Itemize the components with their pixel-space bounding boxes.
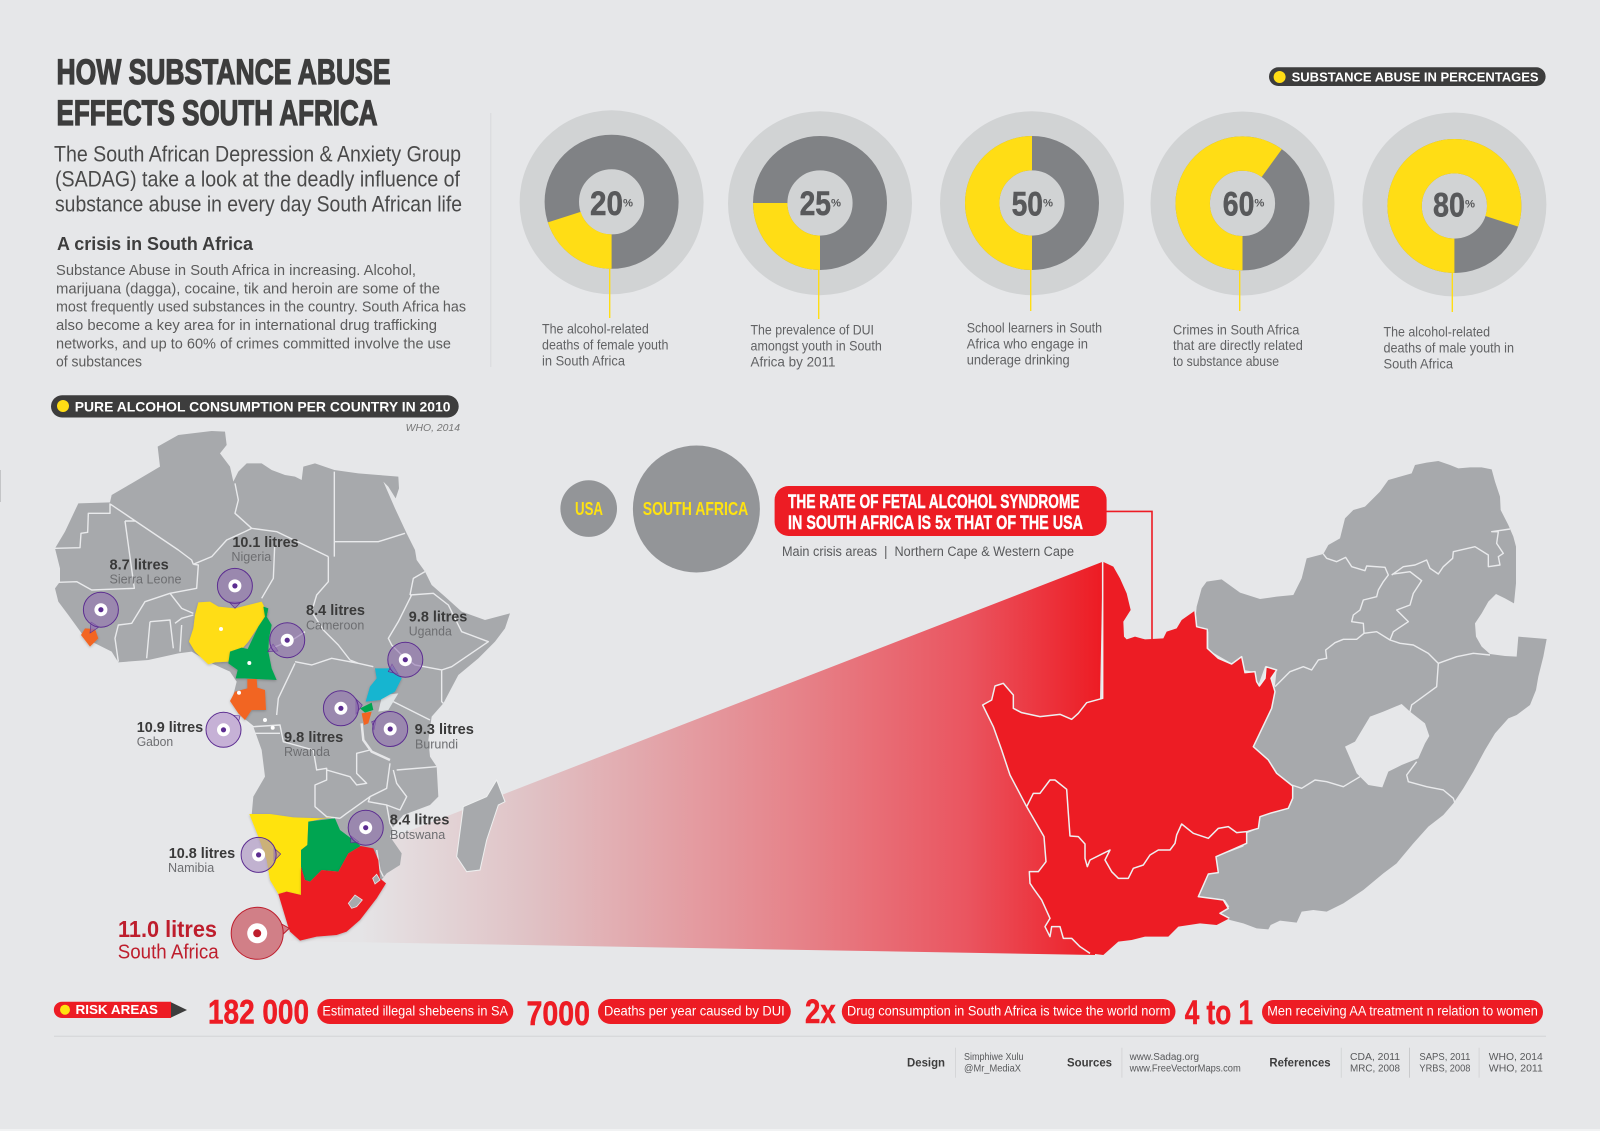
comparison circle: South Africa <box>633 446 760 572</box>
donut chart: 80 percent: deaths of male youth in <box>1384 340 1514 356</box>
footer credits: Sources <box>1067 1056 1112 1070</box>
donut chart: 25 percent: Africa by 2011 <box>750 353 836 369</box>
donut chart: 25 percent: 25 <box>800 185 831 223</box>
marker: Burundi <box>372 712 408 746</box>
donut chart: 80 percent <box>1362 112 1546 371</box>
Cameroon <box>228 607 277 680</box>
Rwanda <box>360 703 373 713</box>
label: South Africa: South Africa <box>118 942 220 964</box>
intro body text: Substance Abuse in South Africa in increasing. Alcohol, <box>56 262 416 279</box>
Lake Tanganyika <box>362 723 390 760</box>
risk areas tag: RISK AREAS <box>76 1002 158 1017</box>
label: Nigeria <box>231 534 299 564</box>
footer credits: MRC, 2008 <box>1350 1063 1400 1074</box>
label: South Africa: 11.0 litres <box>118 916 217 942</box>
intro body text: also become a key area for in international drug trafficking <box>56 317 437 334</box>
southern Africa detail <box>245 702 505 877</box>
label: Uganda <box>409 608 467 639</box>
label: Cameroon: Cameroon <box>306 618 364 632</box>
comparison circle: South Africa: SOUTH AFRICA <box>643 499 748 519</box>
donut chart: 50 percent: 50 <box>1012 186 1043 224</box>
label: Uganda: 9.8 litres <box>409 608 467 626</box>
donut chart: 20 percent: in South Africa <box>542 352 625 368</box>
donut chart: 60 percent: Crimes in South Africa <box>1173 321 1299 337</box>
donut chart: 50 percent: underage drinking <box>967 352 1070 368</box>
label: Cameroon <box>306 602 365 632</box>
crisis areas note: Main crisis areas | Northern Cape & Western Cape <box>782 544 1074 559</box>
marker: Botswana <box>348 810 383 845</box>
donut chart: 80 percent: The alcohol-related <box>1384 324 1490 340</box>
label: Nigeria: 10.1 litres <box>232 534 299 551</box>
label: Namibia <box>168 845 235 875</box>
subtitle: substance abuse in every day South African life <box>55 192 462 217</box>
footer credits: @Mr_MediaX <box>964 1063 1021 1074</box>
South Africa <box>278 846 386 941</box>
marker: Rwanda <box>323 691 362 726</box>
subtitle <box>54 142 462 217</box>
donut chart: 20 percent: % <box>623 198 633 210</box>
Cape province borders <box>983 562 1293 953</box>
callout: fetal alcohol syndrome: IN SOUTH AFRICA IS 5x THAT OF THE USA <box>788 512 1083 534</box>
donut chart: 50 percent: % <box>1043 198 1053 210</box>
label: Cameroon: 8.4 litres <box>306 602 365 619</box>
stat: 2x: 2x <box>805 993 836 1031</box>
footer credits: Simphiwe Xulu <box>964 1052 1024 1063</box>
stat: 7000 <box>526 995 791 1033</box>
footer credits: Design <box>907 1056 945 1070</box>
label: Gabon: 10.9 litres <box>137 719 203 736</box>
donut chart: 80 percent: % <box>1465 198 1475 210</box>
label: Burundi <box>415 721 474 752</box>
stat: 4 to 1: 4 to 1 <box>1185 994 1253 1032</box>
stat: 182 000 <box>208 993 513 1031</box>
donut chart: 60 percent: to substance abuse <box>1173 353 1279 369</box>
label: Burundi: 9.3 litres <box>415 721 474 738</box>
label: Namibia: 10.8 litres <box>169 845 235 862</box>
marker: South Africa <box>231 907 289 959</box>
donut chart: 50 percent: Africa who engage in <box>967 336 1088 352</box>
Namibia <box>249 814 333 895</box>
Lake Victoria <box>378 693 398 712</box>
label: Botswana: Botswana <box>390 827 446 842</box>
donut chart: 20 percent: The alcohol-related <box>542 320 649 336</box>
Lesotho <box>348 895 362 908</box>
stat: 2x <box>805 993 1176 1031</box>
donut chart: 80 percent: 80 <box>1433 187 1465 225</box>
subtitle: The South African Depression & Anxiety Group <box>54 142 461 167</box>
donut chart: 20 percent: 20 <box>590 185 623 223</box>
title: EFFECTS SOUTH AFRICA <box>56 94 378 133</box>
heading: a crisis in South Africa: A crisis in South Africa <box>57 234 254 254</box>
source note: WHO, 2014 <box>406 423 460 434</box>
donut chart: 60 percent: % <box>1254 198 1265 210</box>
label: Rwanda <box>284 729 343 759</box>
intro body text <box>56 262 466 371</box>
donut chart: 60 percent <box>1150 112 1334 369</box>
risk areas tag <box>54 1002 187 1018</box>
footer credits: www.Sadag.org <box>1129 1052 1199 1063</box>
intro body text: networks, and up to 60% of crimes committed involve the use <box>56 335 451 352</box>
donut chart: 50 percent <box>940 111 1124 368</box>
pill heading: pure alcohol consumption <box>51 395 459 418</box>
stat: 7000: 7000 <box>526 995 590 1033</box>
footer credits: WHO, 2011 <box>1489 1063 1543 1074</box>
marker: Sierra Leone <box>83 592 118 633</box>
comparison circle: USA <box>560 480 617 537</box>
label: Namibia: Namibia <box>168 860 215 875</box>
map: Africa <box>55 431 510 941</box>
capital dots <box>219 627 275 730</box>
marker: Namibia <box>241 837 281 872</box>
marker: Uganda <box>388 642 423 677</box>
southern borders <box>245 702 437 877</box>
label: Rwanda: Rwanda <box>284 744 331 759</box>
donut chart: 20 percent <box>520 110 704 368</box>
stat: 2x: Drug consumption in South Africa is twice the world norm <box>847 1004 1170 1019</box>
title <box>56 53 390 133</box>
label: Nigeria: Nigeria <box>231 549 272 564</box>
comparison circle: USA: USA <box>575 499 603 519</box>
grey provinces <box>1195 461 1547 929</box>
pill heading: substance abuse in percentages: SUBSTANCE ABUSE IN PERCENTAGES <box>1292 70 1539 85</box>
Sierra Leone <box>81 628 98 647</box>
donut chart: 50 percent: School learners in South <box>967 320 1102 336</box>
map: South Africa provinces <box>983 461 1547 955</box>
stat: 7000: Deaths per year caused by DUI <box>604 1004 785 1019</box>
callout connector <box>1106 511 1152 639</box>
donut chart: 60 percent: 60 <box>1223 186 1254 224</box>
pill heading: pure alcohol consumption: PURE ALCOHOL CONSUMPTION PER COUNTRY IN 2010 <box>75 398 451 414</box>
label: Sierra Leone: 8.7 litres <box>110 556 169 573</box>
footer credits: CDA, 2011 <box>1350 1052 1400 1063</box>
intro body text: marijuana (dagga), cocaine, tik and heroin are some of the <box>56 280 440 297</box>
stat: 182 000: 182 000 <box>208 993 309 1031</box>
footer credits <box>907 1048 1543 1078</box>
label: Gabon: Gabon <box>137 734 173 749</box>
callout: fetal alcohol syndrome: THE RATE OF FETAL ALCOHOL SYNDROME <box>788 491 1080 513</box>
subtitle: (SADAG) take a look at the deadly influence of <box>55 167 461 192</box>
zoom gradient band <box>290 562 1103 955</box>
label: Sierra Leone <box>110 556 182 587</box>
country borders <box>55 472 488 715</box>
marker: Gabon <box>206 712 241 747</box>
stat: 4 to 1 <box>1185 994 1543 1032</box>
marker: Cameroon <box>268 623 305 658</box>
footer credits: SAPS, 2011 <box>1419 1052 1471 1063</box>
Northern and Western Cape <box>983 562 1293 955</box>
label: Gabon <box>137 719 203 749</box>
donut chart: 25 percent: amongst youth in South <box>750 337 882 353</box>
donut chart: 25 percent: The prevalence of DUI <box>750 321 874 337</box>
donut chart: 60 percent: that are directly related <box>1173 337 1303 353</box>
label: Burundi: Burundi <box>415 736 458 752</box>
Africa landmass <box>55 431 510 925</box>
label: Sierra Leone: Sierra Leone <box>110 572 182 587</box>
intro body text: most frequently used substances in the country. South Africa has <box>56 299 466 316</box>
Nigeria <box>189 602 268 664</box>
footer credits: References <box>1269 1056 1331 1070</box>
Madagascar <box>457 780 505 872</box>
label: Botswana <box>390 811 449 842</box>
label: Rwanda: 9.8 litres <box>284 729 343 746</box>
stat: 182 000: Estimated illegal shebeens in SA <box>322 1004 508 1019</box>
Gabon <box>230 679 266 720</box>
stat: 4 to 1: Men receiving AA treatment n relation to women <box>1267 1004 1538 1019</box>
footer credits: www.FreeVectorMaps.com <box>1129 1063 1241 1074</box>
label: South Africa <box>118 916 220 964</box>
title: HOW SUBSTANCE ABUSE <box>56 53 390 92</box>
Lesotho <box>1345 704 1429 787</box>
Burundi <box>362 712 372 725</box>
footer credits: WHO, 2014 <box>1489 1052 1543 1063</box>
callout: fetal alcohol syndrome <box>775 486 1107 536</box>
Botswana <box>301 818 361 882</box>
province borders <box>1275 529 1510 803</box>
footer credits: YRBS, 2008 <box>1419 1063 1471 1074</box>
Uganda <box>366 667 402 702</box>
intro body text: of substances <box>56 354 142 371</box>
donut chart: 25 percent <box>728 111 912 369</box>
donut chart: 25 percent: % <box>831 198 841 210</box>
donut chart: 20 percent: deaths of female youth <box>542 336 668 352</box>
label: Uganda: Uganda <box>409 624 453 639</box>
donut chart: 80 percent: South Africa <box>1384 355 1453 371</box>
label: Botswana: 8.4 litres <box>390 811 449 828</box>
Swaziland <box>373 874 380 884</box>
marker: Nigeria <box>217 568 252 608</box>
